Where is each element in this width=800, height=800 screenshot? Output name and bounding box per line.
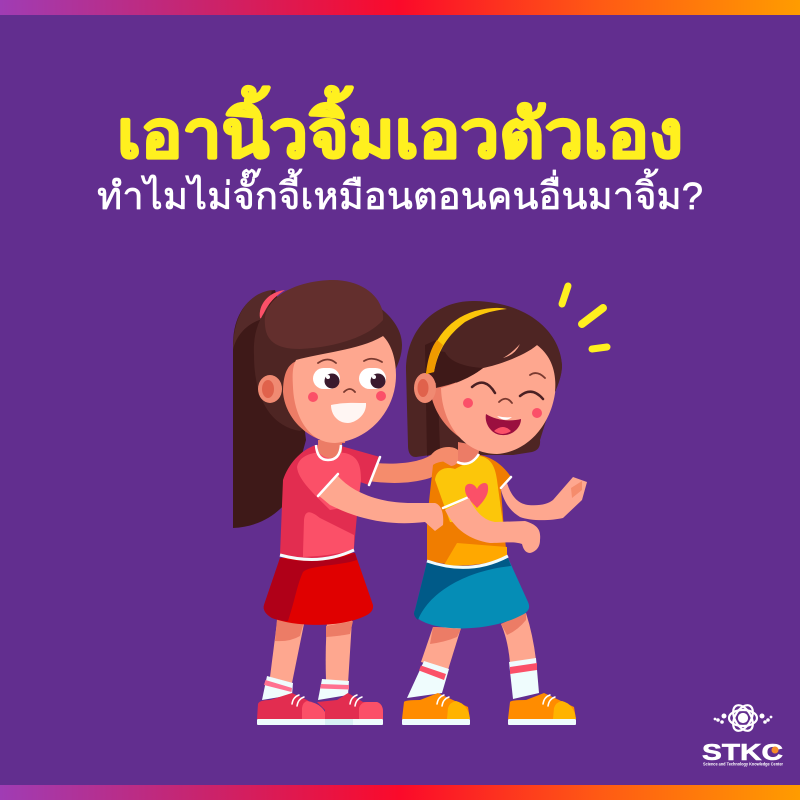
surprise spark lines bbox=[562, 286, 607, 349]
neck and collar bbox=[457, 442, 480, 464]
legs bbox=[421, 613, 536, 670]
logo atom icon bbox=[714, 702, 772, 734]
neck and collar bbox=[316, 440, 342, 460]
hair back bbox=[254, 285, 402, 431]
left shoe bbox=[257, 693, 326, 725]
left arm front bbox=[445, 498, 540, 553]
face bbox=[293, 336, 396, 443]
title: เอานิ้วจิ้มเอวตัวเอง bbox=[117, 85, 683, 171]
subtitle: ทำไมไม่จั๊กจี้เหมือนตอนคนอื่นมาจิ้ม? bbox=[97, 168, 703, 218]
legs bbox=[270, 619, 353, 684]
shirt bbox=[427, 455, 511, 567]
right shoe bbox=[317, 693, 383, 725]
cheeks bbox=[463, 398, 542, 418]
ear bbox=[414, 373, 436, 403]
right arm waving bbox=[501, 477, 587, 520]
socks bbox=[262, 676, 349, 700]
logo tagline: Science and Technology Knowledge Center bbox=[703, 762, 783, 766]
cheeks bbox=[308, 391, 386, 402]
ear bbox=[258, 375, 282, 403]
skirt bbox=[414, 558, 529, 628]
illustration: girl poking friend bbox=[233, 280, 587, 725]
smile bbox=[331, 403, 366, 423]
right girl bbox=[402, 301, 587, 725]
shirt bbox=[280, 445, 380, 559]
face shadow bbox=[283, 360, 350, 443]
top gradient bar bbox=[0, 0, 800, 15]
eyebrows and nose bbox=[318, 359, 382, 392]
ponytail bbox=[233, 290, 306, 528]
headband bbox=[426, 308, 507, 374]
eyes bbox=[313, 368, 386, 389]
socks bbox=[407, 658, 539, 699]
bottom gradient bar bbox=[0, 785, 800, 800]
right shoe bbox=[508, 693, 576, 725]
left girl's poking arm bbox=[318, 474, 443, 531]
back arm bbox=[368, 447, 460, 483]
STKC logo bbox=[702, 702, 783, 766]
eyebrow and nose bbox=[499, 373, 545, 403]
logo orange dot bbox=[772, 746, 778, 754]
laughing mouth bbox=[486, 414, 521, 435]
back hair bbox=[406, 301, 562, 457]
face shadow bbox=[430, 370, 490, 450]
left girl bbox=[233, 280, 460, 725]
face bbox=[441, 345, 556, 454]
fringe bbox=[433, 309, 562, 392]
logo wordmark: STKC bbox=[702, 739, 783, 765]
hair top bbox=[265, 280, 383, 349]
left shoe bbox=[402, 693, 470, 725]
skirt bbox=[264, 553, 373, 625]
closed eyes bbox=[472, 383, 543, 399]
hand on shoulder bbox=[431, 447, 460, 466]
heart bbox=[465, 483, 488, 508]
